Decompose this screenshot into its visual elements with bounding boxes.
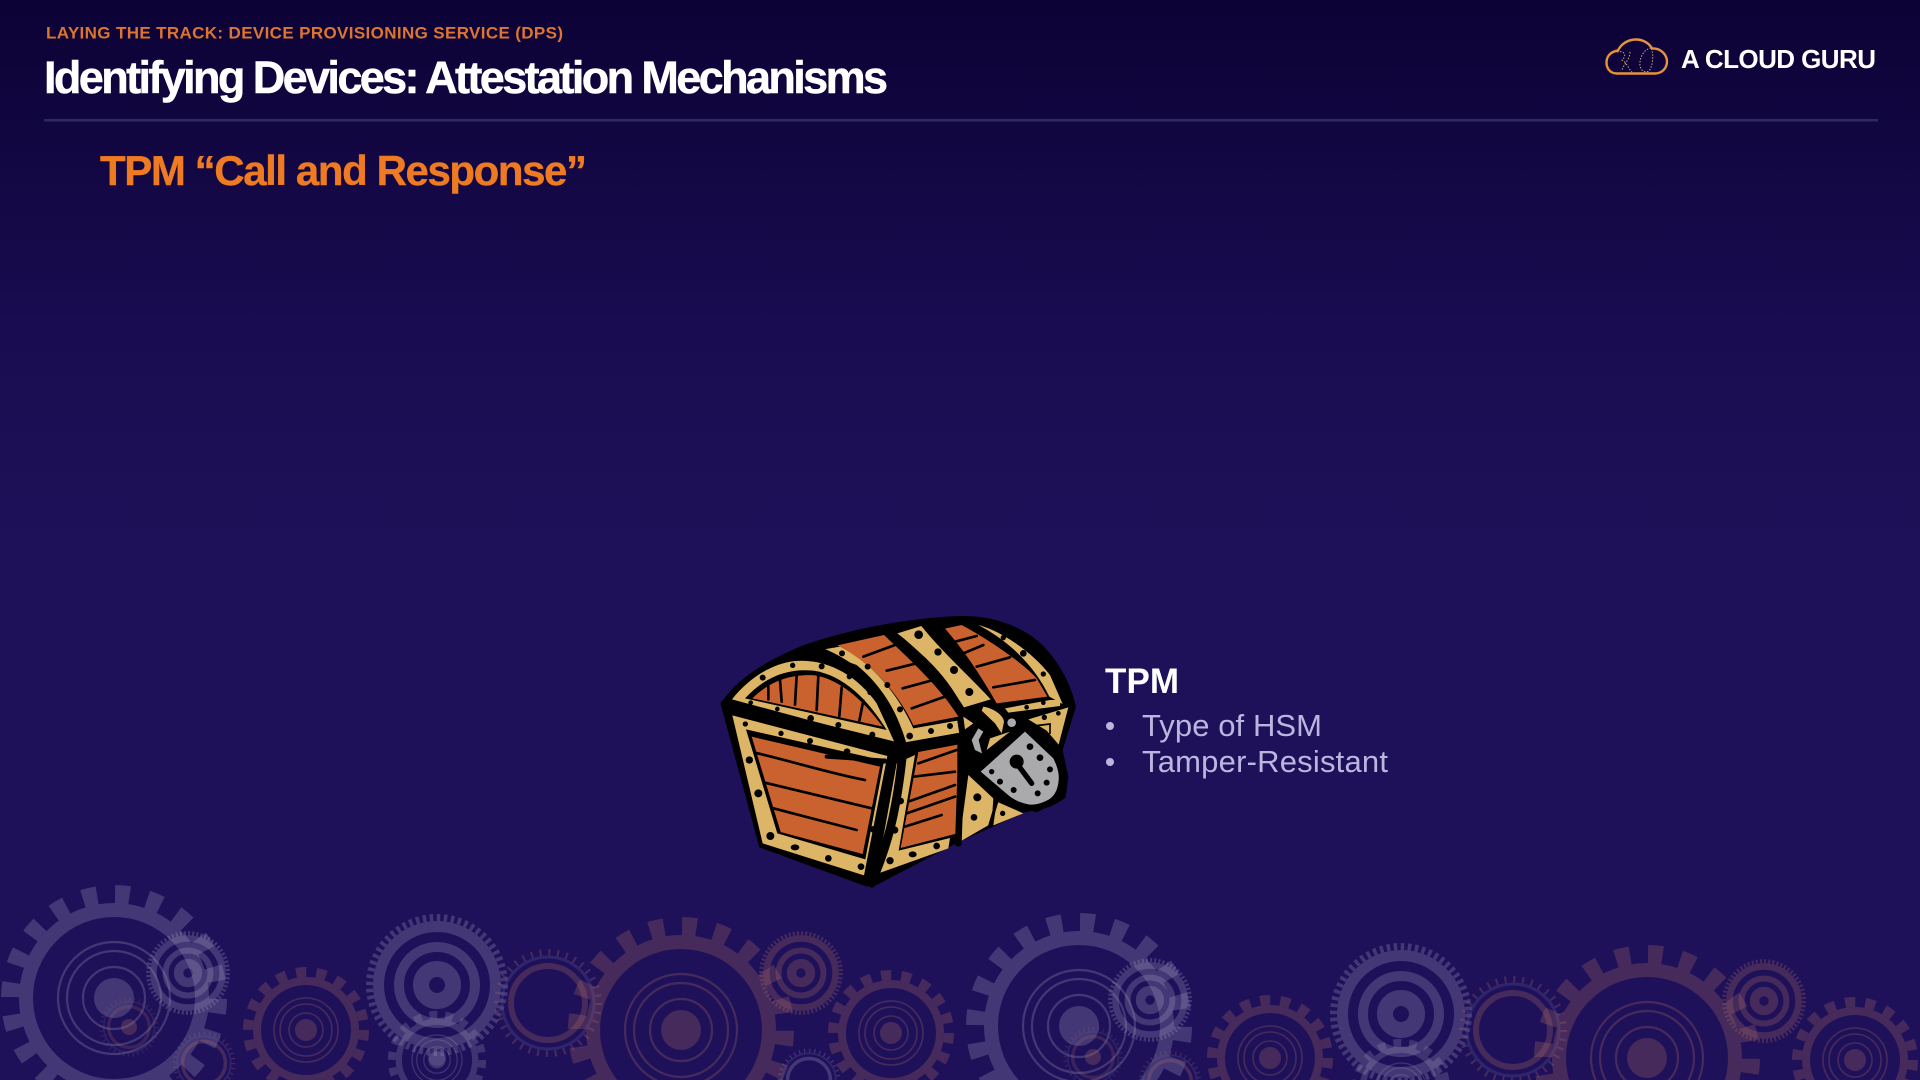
lid planks [837, 635, 958, 725]
logo wordmark: A CLOUD GURU [1681, 44, 1876, 74]
padlock body [972, 726, 1067, 812]
right strap [978, 625, 1063, 704]
keyhole [1010, 755, 1024, 769]
right planks [945, 625, 1047, 703]
logo: A Cloud Guru [1606, 40, 1876, 74]
gear border decoration [11, 895, 1913, 1080]
padlock rivets [989, 743, 1053, 796]
bullet: Tamper-Resistant: Tamper-Resistant [1142, 744, 1388, 779]
padlock [960, 704, 1067, 812]
chest silhouette [721, 616, 1076, 887]
side panel planks [901, 745, 957, 848]
callout heading: TPM [1105, 662, 1179, 701]
bullet: Type of HSM: Type of HSM [1142, 708, 1322, 743]
front panel planks [752, 737, 880, 854]
side lower tan panels [959, 775, 993, 842]
lid arch end [732, 661, 895, 743]
title: Identifying Devices: Attestation Mechanisms [44, 52, 888, 103]
plank lines [755, 636, 1050, 830]
lid band [817, 647, 959, 745]
rivets [743, 630, 1061, 870]
icon: cloud [1606, 40, 1667, 74]
padlock shackle [960, 704, 1020, 773]
side panel strip [877, 755, 950, 874]
icon: treasure chest [721, 616, 1076, 887]
callout: TPM definition [1105, 662, 1388, 779]
black straps and dividers [725, 635, 998, 883]
middle strap [897, 626, 991, 707]
section kicker: LAYING THE TRACK: DEVICE PROVISIONING SERVICE (DPS) [46, 24, 563, 42]
front panel frame [732, 715, 887, 875]
subtitle: TPM “Call and Response” [100, 147, 587, 194]
header divider [44, 119, 1878, 122]
